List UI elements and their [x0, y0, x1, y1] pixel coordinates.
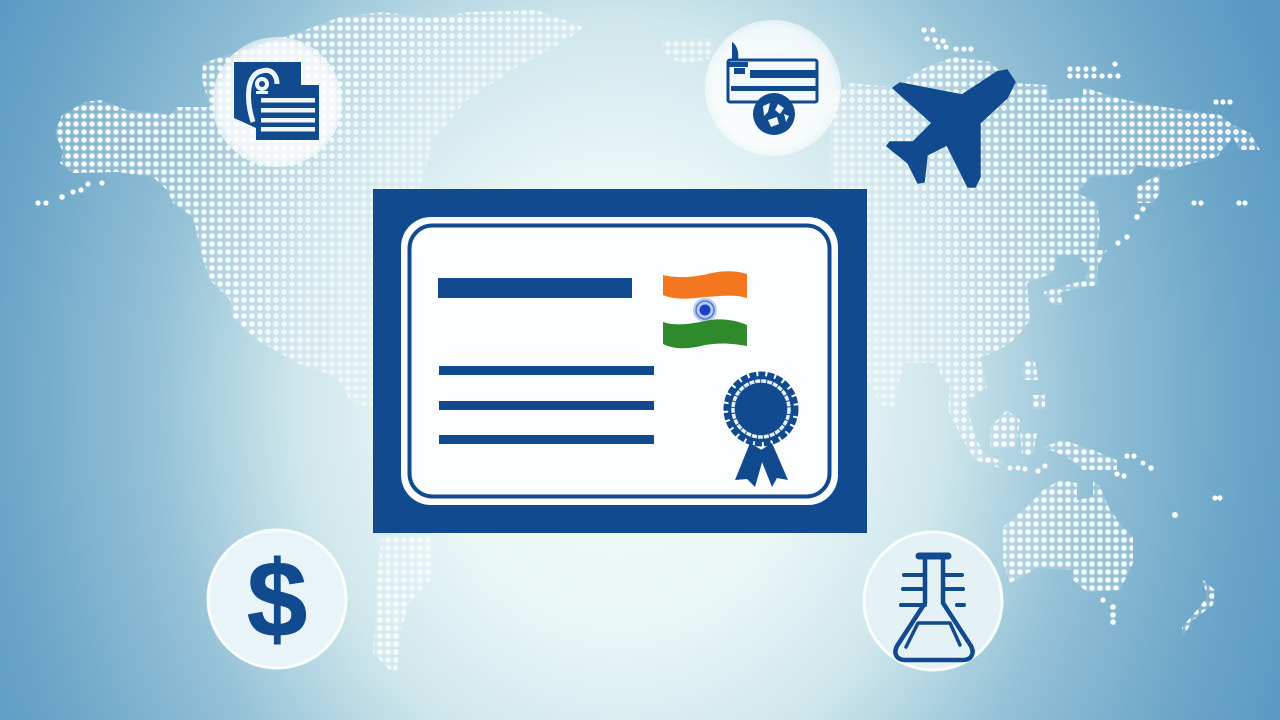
card inner border [410, 226, 830, 496]
certificate card [373, 189, 867, 533]
map: small islands [35, 27, 1248, 625]
circle badge: documents [212, 37, 342, 167]
icon: card with globe [728, 42, 817, 135]
circle badge: payment card [705, 20, 841, 156]
icon: airplane [887, 70, 1015, 187]
card white frame [401, 217, 838, 505]
heading bar [438, 278, 632, 298]
icon: dollar sign: $ [247, 538, 307, 659]
circle badge: dollar [208, 530, 346, 668]
icon: rosette seal [726, 374, 796, 487]
circle badge: flask [864, 532, 1002, 670]
icon: documents [234, 62, 319, 140]
text lines [439, 366, 654, 444]
icon: laboratory flask [895, 556, 973, 660]
card outer panel [373, 189, 867, 533]
icon: Indian flag [663, 271, 747, 348]
